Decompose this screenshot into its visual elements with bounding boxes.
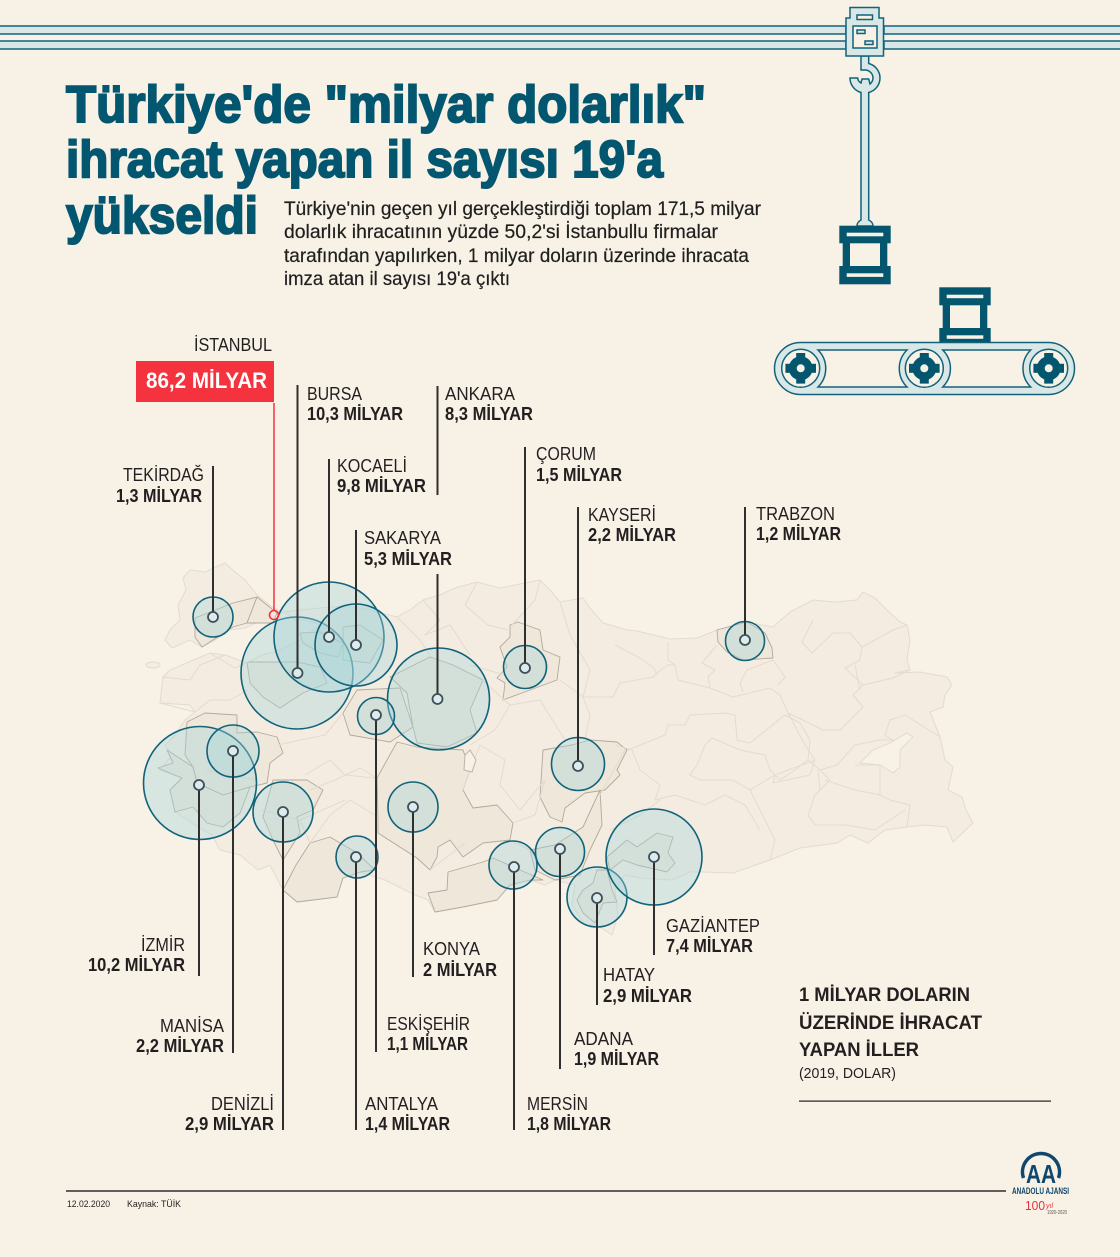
label: Mersin: 1,8 MİLYAR (527, 1113, 611, 1134)
icon: Anadolu Ajansı logo: AA (1026, 1159, 1056, 1189)
label: Mersin: MERSİN (527, 1093, 588, 1114)
chart caption: YAPAN İLLER (799, 1038, 919, 1061)
label: Adana: 1,9 MİLYAR (574, 1048, 659, 1069)
icon: Anadolu Ajansı logo: yıl (1045, 1203, 1053, 1210)
chart caption: ÜZERİNDE İHRACAT (799, 1011, 982, 1034)
label: Manisa: 2,2 MİLYAR (136, 1035, 224, 1056)
bubble: Gaziantep (606, 809, 702, 905)
label: Çorum: ÇORUM (536, 443, 596, 464)
label: Antalya: 1,4 MİLYAR (365, 1113, 450, 1134)
bubble: Bursa (241, 617, 353, 729)
label: Manisa (136, 1015, 225, 1056)
label: İzmir (88, 934, 185, 975)
bubble: İzmir (144, 726, 256, 840)
label: Trabzon (756, 503, 841, 544)
icon: Anadolu Ajansı logo: 100 (1025, 1198, 1045, 1213)
icon: crane rails with trolley and hook (0, 8, 1120, 226)
chart caption (799, 983, 1051, 1102)
map of Turkey provinces (146, 563, 973, 935)
label: İzmir: İZMİR (141, 934, 185, 955)
label: Denizli (185, 1093, 274, 1134)
title: yükseldi (66, 187, 258, 245)
label: Trabzon: 1,2 MİLYAR (756, 523, 841, 544)
leader lines (199, 385, 745, 1130)
callout: İstanbul: 86,2 MİLYAR (146, 368, 267, 393)
bubble: Çorum (504, 646, 546, 688)
label: Çorum (536, 443, 622, 485)
label: Denizli: DENİZLİ (211, 1093, 274, 1114)
label: Mersin (527, 1093, 611, 1134)
title: Türkiye'de "milyar dolarlık" (66, 76, 706, 134)
label: Ankara: ANKARA (445, 383, 516, 404)
intro text: dolarlık ihracatının yüzde 50,2'si İstanbullu firmalar (284, 220, 718, 243)
label: Gaziantep: GAZİANTEP (666, 915, 760, 936)
label: Ankara: 8,3 MİLYAR (445, 403, 533, 424)
label: Antalya (365, 1093, 450, 1134)
label: Konya (423, 938, 497, 980)
icon: crate on conveyor (939, 287, 991, 343)
label: Kocaeli: KOCAELİ (337, 455, 407, 476)
bubble: Kayseri (552, 738, 604, 790)
label: İzmir: 10,2 MİLYAR (88, 954, 185, 975)
label: Eskişehir: 1,1 MİLYAR (387, 1033, 468, 1054)
label: Bursa: BURSA (307, 383, 363, 404)
footer: Kaynak: TÜİK (127, 1199, 181, 1209)
callout: İstanbul: İSTANBUL (194, 334, 272, 355)
label: Bursa (307, 383, 403, 424)
label: Çorum: 1,5 MİLYAR (536, 464, 622, 485)
label: Kocaeli (337, 455, 426, 496)
bubble: Eskişehir (358, 698, 394, 734)
title: ihracat yapan il sayısı 19'a (66, 131, 664, 189)
footer (66, 1190, 1006, 1209)
intro text: Türkiye'nin geçen yıl gerçekleştirdiği toplam 171,5 milyar (284, 198, 761, 220)
bubble: Tekirdağ (193, 597, 233, 637)
bubble: Trabzon (726, 622, 764, 660)
label: Sakarya: 5,3 MİLYAR (364, 548, 452, 569)
location dots (194, 610, 750, 903)
chart caption: (2019, DOLAR) (799, 1065, 896, 1082)
title (66, 76, 706, 245)
icon: Anadolu Ajansı logo: ANADOLU AJANSI (1012, 1186, 1069, 1196)
label: Kayseri (588, 504, 676, 545)
label: Eskişehir: ESKİŞEHİR (387, 1013, 470, 1034)
label: Adana: ADANA (574, 1028, 634, 1049)
label: Kocaeli: 9,8 MİLYAR (337, 475, 426, 496)
icon: conveyor belt (774, 342, 1074, 394)
label: Gaziantep: 7,4 MİLYAR (666, 935, 753, 956)
label: Konya: KONYA (423, 938, 481, 959)
label: Konya: 2 MİLYAR (423, 959, 497, 980)
label: Manisa: MANİSA (160, 1015, 225, 1036)
bubble: Denizli (253, 782, 313, 842)
label: Bursa: 10,3 MİLYAR (307, 403, 403, 424)
bubble: Antalya (336, 836, 378, 878)
bubble: Ankara (388, 648, 490, 750)
label: Sakarya (364, 527, 452, 569)
label: Kayseri: 2,2 MİLYAR (588, 524, 676, 545)
label: Gaziantep (666, 915, 760, 956)
bubble: Hatay (567, 867, 627, 927)
bubble: Adana (536, 828, 584, 876)
intro text: imza atan il sayısı 19'a çıktı (284, 268, 510, 290)
label: Ankara (445, 383, 533, 424)
label: Sakarya: SAKARYA (364, 527, 442, 548)
label: Tekirdağ: 1,3 MİLYAR (116, 485, 202, 506)
intro text: tarafından yapılırken, 1 milyar doların üzerinde ihracata (284, 245, 749, 267)
bubble: Sakarya (315, 604, 397, 686)
icon: hanging crate (839, 226, 891, 284)
label: Kayseri: KAYSERİ (588, 504, 656, 525)
label: Denizli: 2,9 MİLYAR (185, 1113, 274, 1134)
label: Tekirdağ: TEKİRDAĞ (123, 464, 204, 485)
bubble: Manisa (207, 725, 259, 777)
bubble: Mersin (489, 841, 537, 889)
label: Hatay (603, 964, 692, 1006)
label: Hatay: 2,9 MİLYAR (603, 985, 692, 1006)
bubbles: provinces (144, 582, 764, 927)
footer: 12.02.2020 (67, 1199, 110, 1209)
icon: Anadolu Ajansı logo: 1920-2020 (1047, 1210, 1067, 1216)
label: Hatay: HATAY (603, 964, 655, 985)
intro text (284, 198, 761, 290)
label: Eskişehir (387, 1013, 470, 1054)
label: Tekirdağ (116, 464, 204, 506)
icon: Anadolu Ajansı logo (1012, 1154, 1069, 1216)
label: Antalya: ANTALYA (365, 1093, 439, 1114)
bubble: Konya (388, 782, 438, 832)
label: Trabzon: TRABZON (756, 503, 835, 524)
callout: İstanbul (136, 334, 274, 402)
bubble: Kocaeli (274, 582, 384, 692)
chart caption: 1 MİLYAR DOLARIN (799, 983, 970, 1006)
label: Adana (574, 1028, 659, 1069)
